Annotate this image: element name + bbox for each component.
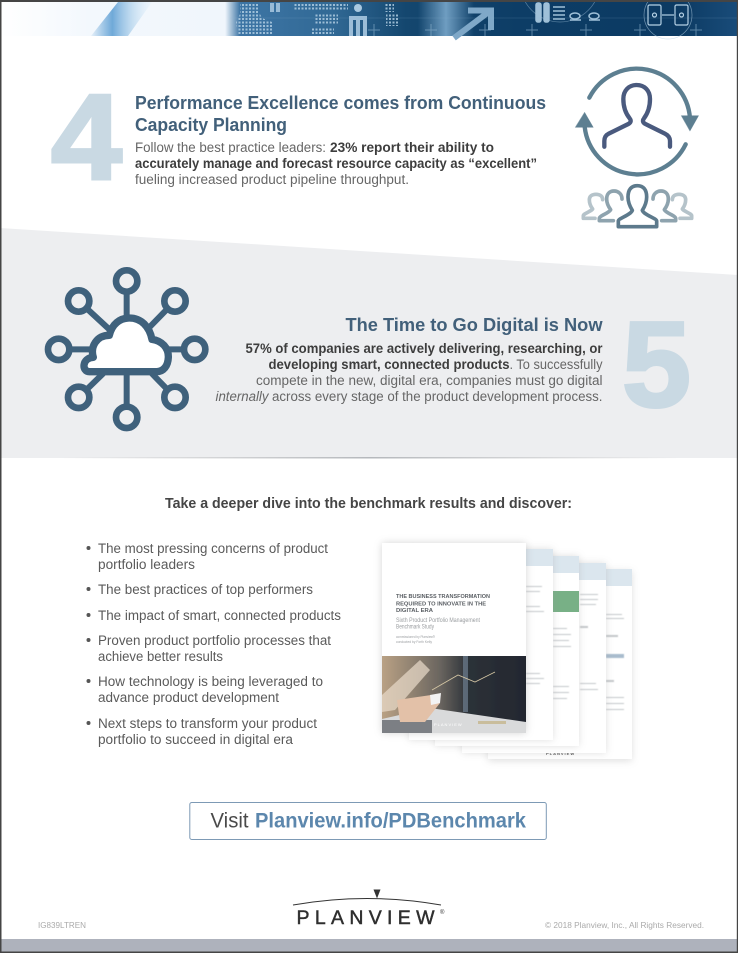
cycle arrows xyxy=(575,69,699,174)
text block: section 5: internally xyxy=(216,389,270,404)
bullet list: advance product development xyxy=(98,690,279,705)
logo: Planview: ® xyxy=(440,909,445,916)
text block: section 4 xyxy=(135,140,537,187)
cover photo xyxy=(382,656,526,733)
text block: section 4: accurately manage and forecast resource capacity as “excellent” xyxy=(135,156,537,171)
cloud xyxy=(84,318,168,372)
report cover: Benchmark Study xyxy=(396,624,434,630)
team outline xyxy=(583,186,692,227)
page 5: PLANVIEW xyxy=(546,751,575,756)
page 5 xyxy=(488,569,632,761)
copyright: © 2018 Planview, Inc., All Rights Reserved. xyxy=(545,920,704,930)
page 4 xyxy=(462,563,606,753)
connector lines xyxy=(67,290,187,408)
text block: section 5 xyxy=(216,341,603,404)
report cover: REQUIRED TO INNOVATE IN THE xyxy=(396,602,486,608)
bullet list: portfolio to succeed in digital era xyxy=(98,732,293,747)
icon: capacity cycle with people xyxy=(575,69,699,227)
heading: section 4: Performance Excellence comes from Continuous xyxy=(135,92,546,113)
logo: Planview: PLANVIEW xyxy=(296,907,435,929)
icon: coins xyxy=(520,0,600,22)
text block: section 4: 23% report their ability to xyxy=(330,140,494,155)
report cover: DIGITAL ERA xyxy=(396,608,434,614)
bullet list: Proven product portfolio processes that xyxy=(98,633,331,648)
footer bar xyxy=(0,939,738,952)
bullet list: The impact of smart, connected products xyxy=(98,608,341,623)
heading: section 5: The Time to Go Digital is Now xyxy=(346,314,603,335)
cover photo: PLANVIEW xyxy=(434,722,463,727)
text block: section 5: 57% of companies are actively delivering, researching, or xyxy=(246,341,603,356)
numeral 4: 4 xyxy=(51,69,122,205)
icon: figures xyxy=(270,3,367,36)
text block: section 4: Follow the best practice leaders: xyxy=(135,140,326,155)
bullet list xyxy=(86,541,341,747)
report stack thumbnail xyxy=(382,543,632,761)
heading: section 4 xyxy=(135,92,546,135)
grid marks xyxy=(230,18,738,36)
bullet list: portfolio leaders xyxy=(98,557,195,572)
report cover: THE BUSINESS TRANSFORMATION xyxy=(396,594,490,600)
document code: IG839LTREN xyxy=(38,920,86,930)
bullet list: The best practices of top performers xyxy=(98,582,313,597)
bullet list: The most pressing concerns of product xyxy=(98,541,328,556)
bullet list: achieve better results xyxy=(98,649,223,664)
text block: section 5: . To successfully xyxy=(510,357,603,372)
call to action button: Visit xyxy=(210,810,249,832)
report cover: conducted by Forth Kelly xyxy=(396,640,432,644)
numeral 5: 5 xyxy=(622,296,691,432)
text block: section 5: across every stage of the product development process. xyxy=(272,389,602,404)
page 2 xyxy=(409,549,553,740)
page 3 xyxy=(435,556,579,746)
header banner xyxy=(0,0,738,39)
icon: phones xyxy=(644,0,692,39)
report cover: Sixth Product Portfolio Management xyxy=(396,618,480,624)
icon: cloud network xyxy=(48,270,205,428)
person outline xyxy=(604,85,670,147)
text block: section 5: compete in the new, digital era, companies must go digital xyxy=(256,373,602,388)
bullet list: How technology is being leveraged to xyxy=(98,674,323,689)
text block: section 5: developing smart, connected products xyxy=(268,357,510,372)
icon: world map dots xyxy=(236,3,398,35)
icon: arrow xyxy=(454,10,491,38)
call to action button: Planview.info/PDBenchmark xyxy=(255,810,526,832)
report cover xyxy=(382,543,526,733)
panel: section 5 background xyxy=(0,228,738,458)
heading: deeper dive: Take a deeper dive into the benchmark results and discover: xyxy=(165,496,572,512)
logo: Planview xyxy=(293,890,445,929)
node rings xyxy=(48,270,205,428)
bullet list: Next steps to transform your product xyxy=(98,716,317,731)
call to action button xyxy=(190,802,546,840)
heading: section 4: Capacity Planning xyxy=(135,114,287,135)
text block: section 4: fueling increased product pipeline throughput. xyxy=(135,172,409,187)
report cover: commissioned by Planview® xyxy=(396,635,435,639)
